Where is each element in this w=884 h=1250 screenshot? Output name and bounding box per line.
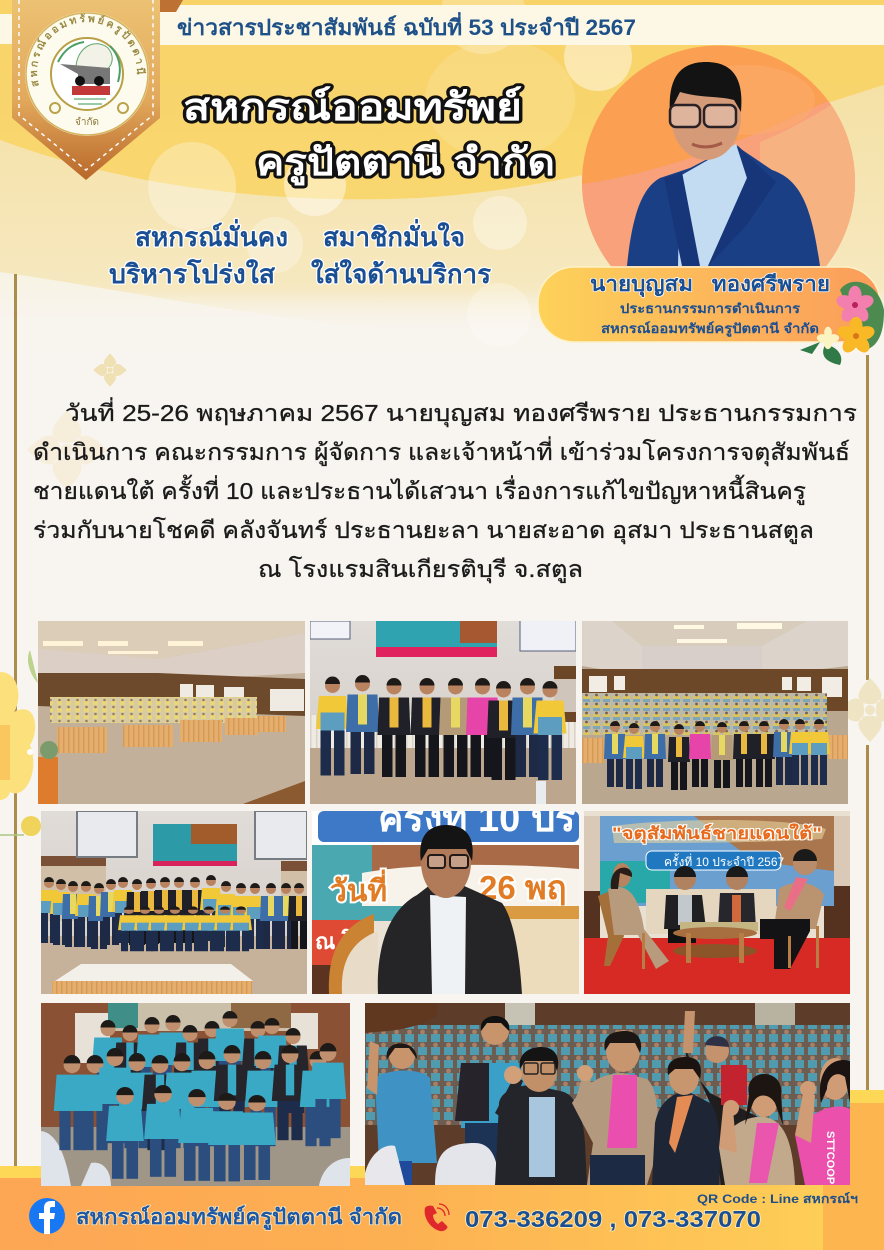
slogans: บริหารโปร่งใส: [109, 258, 275, 289]
side gold rule right: [866, 355, 869, 680]
header strip: newsletter issue: ข่าวสารประชาสัมพันธ์ ฉบับที่ 53 ประจำปี 2567: [177, 11, 636, 40]
name plate: [538, 267, 880, 342]
photo: panel discussion on stage: ครั้งที่ 10 ประจำปี 2567: [664, 853, 785, 869]
title: [183, 86, 555, 186]
title: สหกรณ์ออมทรัพย์: [183, 86, 522, 129]
photo: group with staff: [41, 811, 307, 994]
photo: cheering crowd with raised fists: [365, 1003, 850, 1185]
photo: conference room wide: [38, 621, 305, 804]
ornament: thai flower faint left: [27, 410, 107, 490]
QR code caption: QR Code : Line สหกรณ์ฯ: [697, 1192, 858, 1206]
man in beige jacket: [572, 1030, 658, 1185]
woman in pink polo: [795, 1058, 850, 1185]
photo: group of executives: [310, 621, 576, 804]
photo: panel discussion on stage: "จตุสัมพันธ์ชายแดนใต้": [612, 823, 822, 844]
body text: ชายแดนใต้ ครั้งที่ 10 และประธานได้เสวนา เรื่องการแก้ไขปัญหาหนี้สินครู: [33, 475, 806, 505]
footer: phone numbers: 073-336209 , 073-337070: [465, 1206, 761, 1232]
side gold rule left: [14, 274, 17, 1166]
ornament: thai flower right: [838, 678, 884, 742]
logo seal: [25, 12, 149, 136]
name plate: สหกรณ์ออมทรัพย์ครูปัตตานี จำกัด: [601, 321, 819, 337]
photo: chairman seated close up: วันที่: [330, 869, 387, 908]
body text: ร่วมกับนายโชคดี คลังจันทร์ ประธานยะลา นายสะอาด อุสมา ประธานสตูล: [33, 517, 814, 544]
photo: panel discussion on stage: [584, 811, 850, 994]
name plate: นายบุญสม ทองศรีพราย: [590, 272, 830, 298]
header banner background: [0, 0, 884, 350]
icon: facebook: [29, 1198, 65, 1234]
photo: group in teal shirts: [41, 1003, 350, 1186]
flowers on name plate: [800, 282, 884, 365]
yellow strips and footer background: [0, 1090, 884, 1250]
slogans: [109, 218, 491, 289]
man with vest: [455, 1016, 535, 1185]
photo: chairman seated close up: ณ โ: [315, 928, 354, 954]
ornament: yellow flower left: [0, 650, 41, 836]
portrait of chairman: [582, 46, 855, 266]
photo: chairman seated close up: [312, 790, 579, 994]
footer: facebook page: สหกรณ์ออมทรัพย์ครูปัตตานี จำกัด: [76, 1205, 402, 1231]
woman in beige jacket: [719, 1074, 795, 1185]
man with cap behind: [683, 1011, 770, 1185]
slogans: สมาชิกมั่นใจ: [323, 218, 465, 252]
title: ครูปัตตานี จำกัด: [256, 142, 555, 186]
side gold rule right lower: [866, 745, 869, 1090]
body text: [33, 397, 857, 583]
logo seal: จำกัด: [75, 117, 99, 128]
man in black jacket: [495, 1047, 587, 1185]
slogans: ใส่ใจด้านบริการ: [311, 259, 491, 289]
icon: phone: [425, 1204, 449, 1231]
body text: วันที่ 25-26 พฤษภาคม 2567 นายบุญสม ทองศรีพราย ประธานกรรมการ: [65, 397, 857, 427]
man in navy jacket: [652, 1057, 720, 1185]
ornament: thai flower small: [93, 353, 127, 387]
name plate: ประธานกรรมการดำเนินการ: [620, 301, 800, 316]
body text: ณ โรงแรมสินเกียรติบุรี จ.สตูล: [258, 556, 583, 583]
photo: chairman seated close up: ครั้งที่ 10 ปร: [378, 790, 576, 840]
chairs: [435, 1143, 498, 1185]
woman in blue: [367, 1041, 437, 1185]
photo: large group in conference room: [582, 621, 848, 804]
ribbon badge with logo: [12, 0, 183, 180]
body text: ดำเนินการ คณะกรรมการ ผู้จัดการ และเจ้าหน้าที่ เข้าร่วมโครงการจตุสัมพันธ์: [33, 436, 850, 466]
woman in pink polo: STTCOOP: [824, 1131, 836, 1184]
header strip: newsletter issue: [0, 5, 884, 45]
logo seal: สหกรณ์ออมทรัพย์ครูปัตตานี: [30, 13, 146, 87]
photo: chairman seated close up: 26 พฤ: [479, 869, 567, 906]
slogans: สหกรณ์มั่นคง: [135, 218, 288, 252]
footer: facebook page: [29, 1198, 402, 1234]
